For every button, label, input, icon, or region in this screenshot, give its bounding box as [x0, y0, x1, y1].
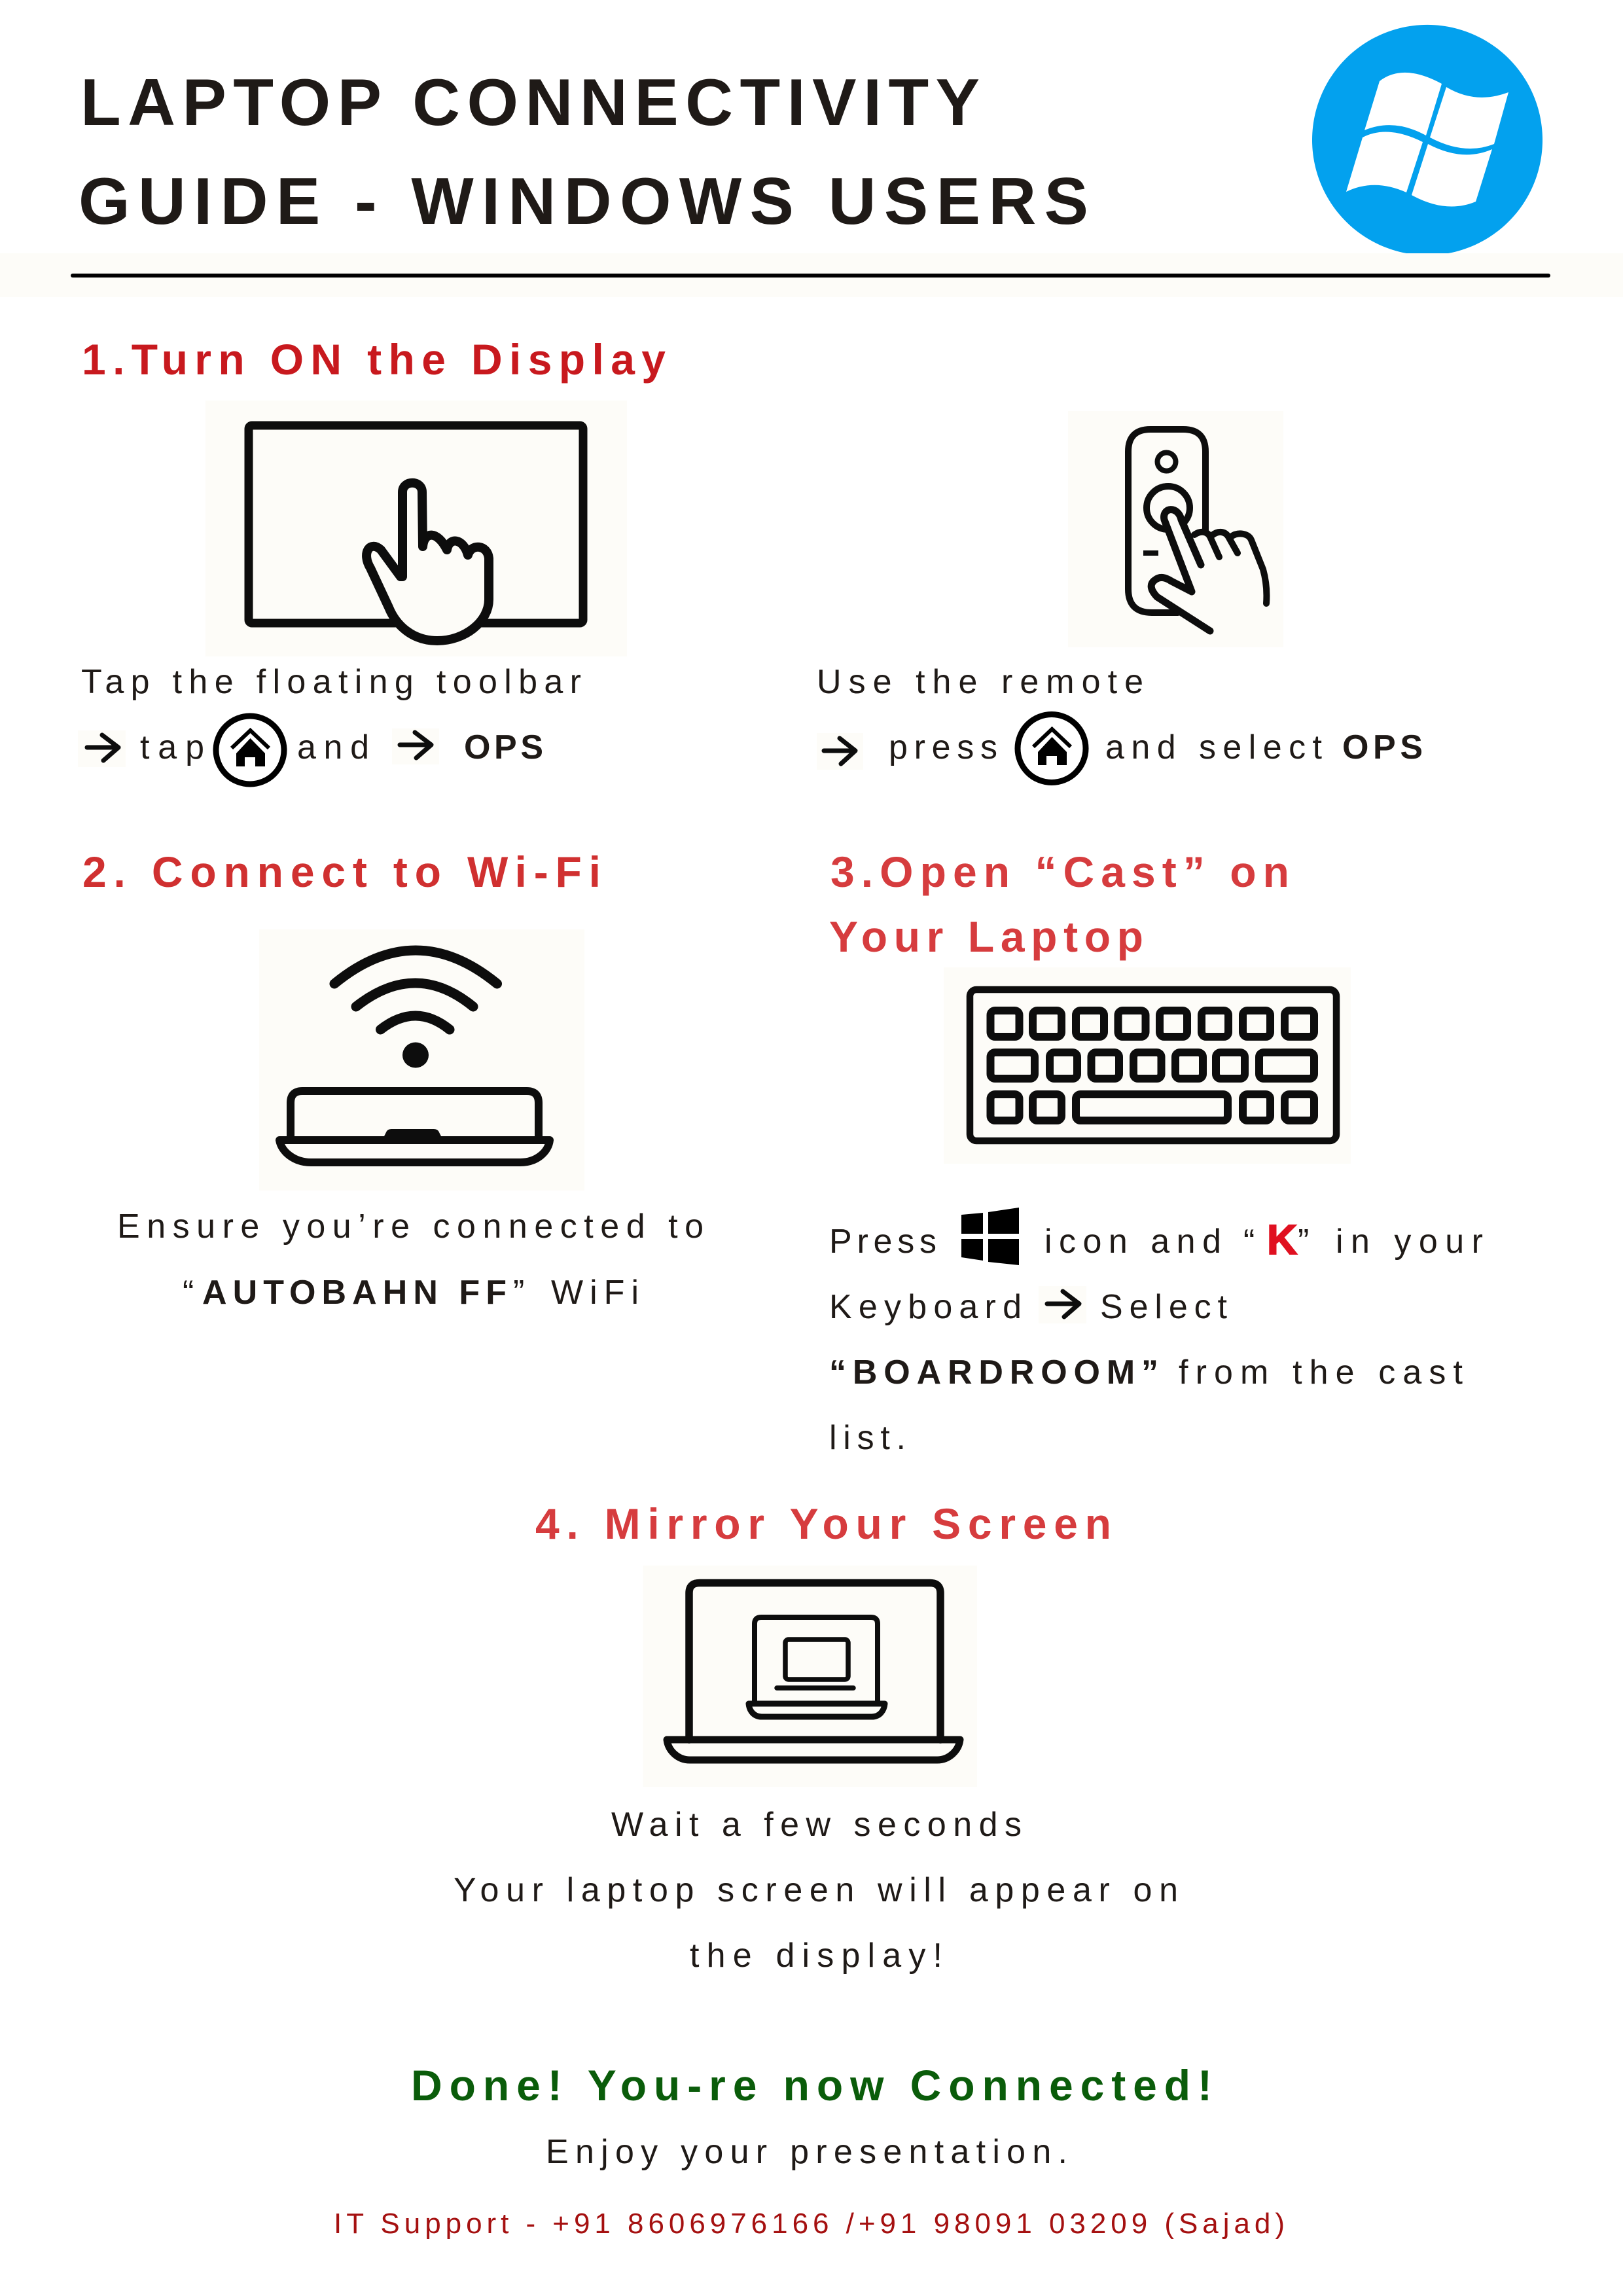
- text: floating toolbar instruction: Tap the floating toolbar: [81, 663, 581, 701]
- text: cast instruction: Keyboard: [829, 1288, 1022, 1326]
- text: cast instruction: icon and: [1044, 1223, 1221, 1261]
- text: cast instruction: ”: [1298, 1223, 1309, 1261]
- text: cast instruction: from the cast: [1179, 1354, 1463, 1391]
- icon: home button: [1018, 715, 1086, 783]
- text: floating toolbar instruction: and: [297, 728, 369, 766]
- text: wait instruction: [454, 1806, 1178, 1975]
- text: enjoy your presentation: Enjoy your presentation.: [546, 2133, 1067, 2171]
- heading: step 3: 3.Open “Cast” on: [830, 848, 1289, 896]
- text: remote instruction: press: [889, 728, 997, 766]
- closing: done message: Done! You-re now Connected!: [411, 2061, 1212, 2109]
- icon: home button: [216, 716, 284, 784]
- heading: step 3: Your Laptop: [829, 912, 1143, 961]
- text: wi-fi instruction: WiFi: [551, 1274, 639, 1312]
- text: cast instruction: K: [1267, 1216, 1297, 1263]
- footer: it support contact: IT Support - +91 8606976166 /+91 98091 03209 (Sajad): [334, 2208, 1285, 2240]
- icon: remote control: [1068, 411, 1283, 647]
- panel: step 1 turn on the display: [78, 335, 1423, 784]
- text: cast instruction: Select: [1100, 1288, 1228, 1326]
- title: LAPTOP CONNECTIVITY: [80, 66, 980, 139]
- text: wi-fi instruction: [117, 1208, 704, 1312]
- icon: keyboard: [944, 967, 1351, 1164]
- panel: step 2 connect to wi-fi: [82, 848, 704, 1312]
- heading: step 4: 4. Mirror Your Screen: [535, 1499, 1111, 1548]
- icon: windows logo: [1312, 25, 1543, 253]
- text: wait instruction: the display!: [690, 1937, 942, 1975]
- text: remote instruction: OPS: [1342, 728, 1423, 766]
- icon: wi-fi laptop: [259, 929, 584, 1191]
- text: wi-fi instruction: Ensure you’re connected to: [117, 1208, 704, 1246]
- text: floating toolbar instruction: tap: [140, 728, 204, 766]
- text: cast instruction: “: [1243, 1223, 1255, 1261]
- text: remote instruction: Use the remote: [817, 663, 1143, 701]
- text: wait instruction: Wait a few seconds: [611, 1806, 1022, 1844]
- icon: touch display: [205, 401, 627, 656]
- panel: step 3 open cast: [829, 848, 1483, 1457]
- text: wi-fi instruction: ”: [513, 1274, 524, 1312]
- heading: step 1: 1.Turn ON the Display: [82, 335, 666, 384]
- panel: step 4 mirror your screen: [454, 1499, 1178, 1975]
- icon: windows key: [961, 1208, 1019, 1265]
- text: cast instruction: [829, 1208, 1483, 1457]
- text: wait instruction: Your laptop screen will appear on: [454, 1871, 1178, 1909]
- text: remote instruction: and select: [1105, 728, 1323, 766]
- icon: mirrored laptop: [643, 1566, 977, 1787]
- title: [79, 66, 1088, 238]
- text: cast instruction: list.: [829, 1419, 906, 1457]
- text: wi-fi instruction: AUTOBAHN FF: [202, 1274, 507, 1312]
- text: cast instruction: in your: [1336, 1223, 1483, 1261]
- text: floating toolbar instruction: [78, 663, 581, 784]
- text: cast instruction: Press: [829, 1223, 936, 1261]
- text: cast instruction: “BOARDROOM”: [829, 1354, 1158, 1391]
- heading: step 2: 2. Connect to Wi-Fi: [82, 848, 601, 896]
- heading: step 3: [829, 848, 1289, 961]
- text: remote instruction: [817, 663, 1423, 783]
- text: wi-fi instruction: “: [183, 1274, 194, 1312]
- text: floating toolbar instruction: OPS: [464, 728, 543, 766]
- header: [0, 25, 1623, 297]
- title: GUIDE - WINDOWS USERS: [79, 165, 1088, 238]
